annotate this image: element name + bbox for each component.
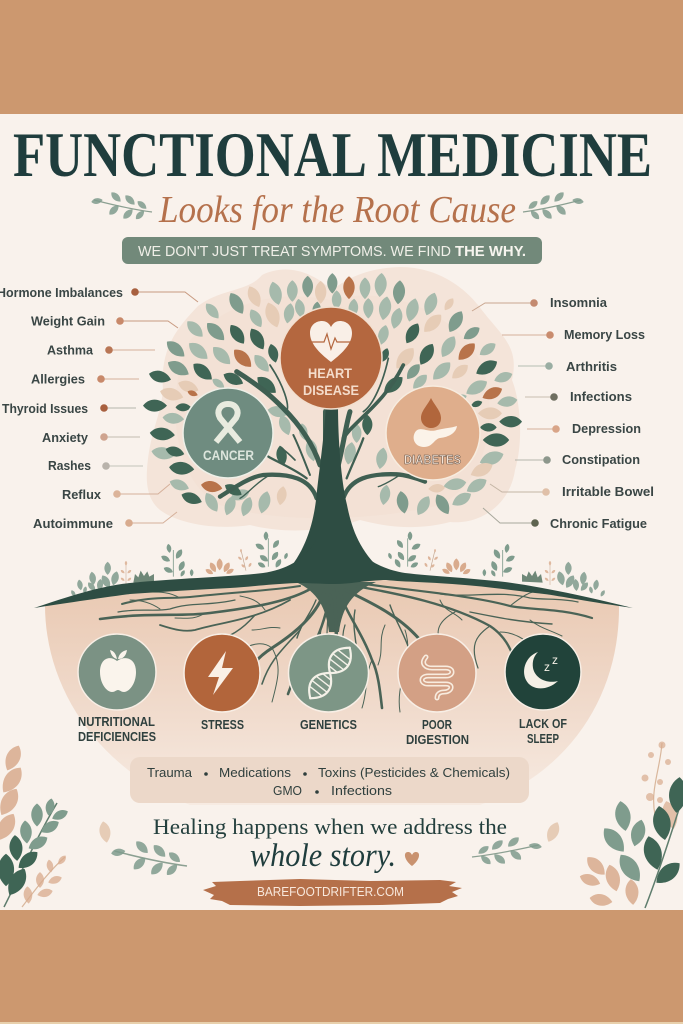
- label: Arthritis: [518, 359, 617, 374]
- circle: heart disease: DISEASE: [303, 382, 359, 398]
- label: Anxiety: [42, 430, 140, 445]
- root cause: stress: [184, 634, 260, 732]
- label: Reflux: [62, 484, 170, 502]
- label: Arthritis: Arthritis: [566, 359, 617, 374]
- root cause: nutritional deficiencies: DEFICIENCIES: [78, 730, 156, 744]
- root cause: lack of sleep: LACK OF: [519, 717, 567, 731]
- circle: diabetes: DIABETES: [404, 452, 461, 467]
- label: Autoimmune: Autoimmune: [33, 516, 113, 531]
- tagline pill: WE DON'T JUST TREAT SYMPTOMS. WE FIND: [138, 243, 451, 260]
- label: Depression: Depression: [572, 421, 641, 436]
- root cause: poor digestion: DIGESTION: [406, 733, 469, 747]
- label: Hormone Imbalances: Hormone Imbalances: [0, 285, 123, 300]
- label: Chronic Fatigue: Chronic Fatigue: [550, 516, 647, 531]
- root cause: nutritional deficiencies: [78, 634, 156, 744]
- label: Autoimmune: [33, 512, 177, 531]
- root cause: stress: STRESS: [201, 718, 244, 732]
- subtitle: Looks for the Root Cause: [158, 189, 516, 231]
- circle: heart disease: HEART: [308, 365, 352, 381]
- label: Chronic Fatigue: [483, 508, 647, 531]
- label: Memory Loss: [502, 327, 645, 342]
- website brush banner: BAREFOOTDRIFTER.COM: [257, 885, 404, 899]
- icon: DNA helix: [303, 642, 357, 704]
- sprig: closing right: [472, 835, 542, 866]
- faint leaf right: [544, 820, 562, 844]
- label: Allergies: [31, 372, 139, 386]
- bottom edge highlight: [0, 1022, 683, 1024]
- label: Infections: [525, 389, 632, 404]
- corner plants bottom left: [0, 743, 70, 907]
- other causes box: [130, 757, 529, 803]
- root cause: lack of sleep: [505, 634, 581, 746]
- tagline pill: [122, 237, 542, 264]
- label: Infections: Infections: [570, 389, 632, 404]
- icon: intestine: [422, 657, 452, 698]
- label: Anxiety: Anxiety: [42, 430, 89, 445]
- label: Depression: [527, 421, 641, 436]
- root cause: genetics: GENETICS: [300, 718, 357, 732]
- icon: blood drop: [421, 398, 441, 428]
- label: Rashes: [48, 458, 143, 473]
- plants above ground right: [387, 531, 606, 597]
- other causes box: GMO: [273, 783, 302, 798]
- tree branches: [220, 358, 425, 498]
- watercolor blob behind canopy: [147, 267, 520, 530]
- other causes box: Medications: [219, 765, 292, 780]
- label: Insomnia: [472, 295, 608, 311]
- label: Insomnia: Insomnia: [550, 295, 608, 310]
- sprig: closing left: [111, 839, 187, 877]
- soil bowl: [45, 578, 619, 805]
- icon: lightning bolt: [208, 651, 233, 695]
- label: Constipation: [515, 452, 640, 467]
- left symptom labels: [0, 285, 198, 531]
- label: Memory Loss: Memory Loss: [564, 327, 645, 342]
- other causes box: Infections: [331, 783, 393, 798]
- label: Hormone Imbalances: [0, 285, 198, 302]
- icon: apple: [100, 650, 136, 692]
- label: Irritable Bowel: [490, 484, 654, 499]
- label: Asthma: Asthma: [47, 342, 94, 358]
- closing script line: whole story.: [250, 838, 396, 874]
- sprig: subtitle left: [91, 190, 152, 221]
- label: Thyroid Issues: Thyroid Issues: [2, 401, 88, 416]
- root cause: nutritional deficiencies: NUTRITIONAL: [78, 715, 155, 729]
- roots: [100, 582, 592, 712]
- other causes box: Toxins (Pesticides & Chemicals): [318, 765, 510, 780]
- root cause: lack of sleep: z: [552, 653, 558, 667]
- circle: diabetes: [386, 386, 480, 480]
- other causes box: Trauma: [147, 765, 193, 780]
- root cause: genetics: [288, 634, 368, 732]
- tagline pill: THE WHY.: [455, 243, 526, 260]
- label: Weight Gain: [31, 314, 178, 328]
- plants above ground left: [70, 531, 289, 597]
- root cause: poor digestion: [398, 634, 476, 747]
- icon: moon and z letters: [524, 652, 558, 688]
- label: Rashes: Rashes: [48, 458, 91, 473]
- website brush banner: [203, 879, 462, 906]
- right symptom labels: [472, 295, 654, 531]
- root cause: poor digestion: POOR: [422, 718, 452, 732]
- closing line: Healing happens when we address the: [153, 814, 507, 839]
- faint leaf left: [98, 820, 112, 844]
- bottom band: [0, 910, 683, 1024]
- top band: [0, 0, 683, 114]
- label: Allergies: Allergies: [31, 372, 85, 386]
- root cause: lack of sleep: SLEEP: [527, 732, 559, 746]
- root cause: lack of sleep: z: [544, 660, 550, 674]
- label: Weight Gain: Weight Gain: [31, 314, 105, 328]
- label: Reflux: Reflux: [62, 487, 102, 502]
- icon: heart with pulse: [310, 321, 352, 362]
- main trunk: [285, 405, 385, 574]
- label: Asthma: [47, 342, 155, 358]
- icon: pancreas: [414, 426, 457, 447]
- ground wedge: [34, 540, 633, 608]
- corner plants bottom right: [578, 742, 683, 908]
- label: Thyroid Issues: [2, 401, 136, 416]
- label: Irritable Bowel: Irritable Bowel: [562, 484, 654, 499]
- circle: cancer: [183, 388, 273, 478]
- tree canopy leaves: [143, 273, 522, 518]
- icon: small heart: [405, 852, 419, 866]
- label: Constipation: Constipation: [562, 452, 640, 467]
- circle: cancer: CANCER: [203, 448, 254, 463]
- circle: heart disease: [280, 307, 382, 409]
- icon: ribbon: [216, 404, 240, 442]
- sprig: subtitle right: [523, 190, 584, 221]
